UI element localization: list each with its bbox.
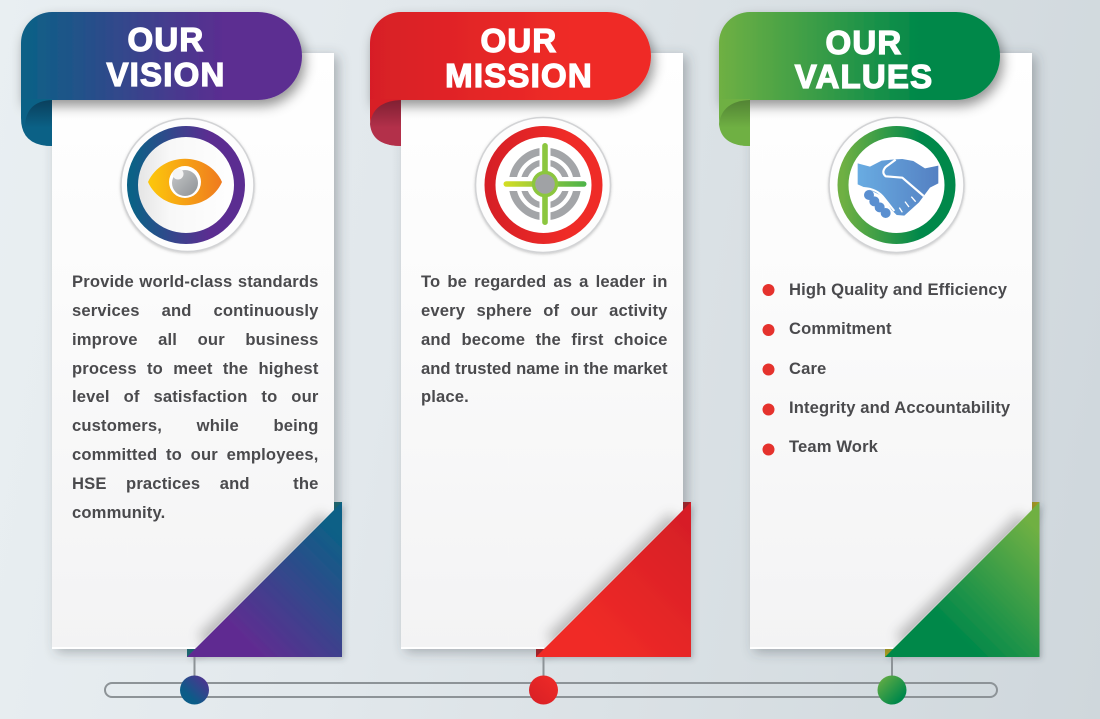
text block: vision statement: community.: [72, 503, 165, 522]
bullets: values: [762, 284, 774, 456]
text: High Quality and Efficiency: [789, 280, 1007, 299]
timeline track: [105, 683, 997, 697]
icon: eye badge: [121, 118, 254, 252]
corner triangle: vision: [187, 502, 342, 657]
connector dot: vision: [180, 657, 209, 704]
text block: vision statement: level of satisfaction to our: [72, 387, 318, 406]
corner square: values: [885, 502, 1040, 657]
heading: our values: VALUES: [795, 58, 933, 95]
panel: vision: [21, 12, 342, 704]
panel: mission: [370, 12, 691, 704]
paper: mission: [401, 53, 683, 649]
ribbon: values: [719, 12, 1000, 100]
icon: target badge: [476, 118, 610, 252]
icon: handshake badge: [829, 118, 964, 252]
corner square: vision: [187, 502, 342, 657]
text: Team Work: [789, 437, 878, 456]
text block: vision statement: [72, 272, 318, 522]
text block: mission statement: and become the first choice: [421, 330, 668, 349]
text block: vision statement: committed to our employees,: [72, 445, 318, 464]
ribbon: vision: [21, 12, 302, 100]
fold shade: values: [750, 510, 1032, 649]
fold shade: vision: [52, 510, 334, 649]
fold shade: mission: [401, 510, 683, 649]
corner triangle: mission: [536, 502, 691, 657]
text block: mission statement: every sphere of our activity: [421, 301, 668, 320]
text block: mission statement: place.: [421, 387, 469, 406]
text block: mission statement: To be regarded as a leader in: [421, 272, 668, 291]
ribbon: mission: [370, 12, 651, 100]
text block: vision statement: improve all our business: [72, 330, 318, 349]
text block: vision statement: process to meet the highest: [72, 359, 318, 378]
heading: our mission: MISSION: [445, 57, 593, 94]
text block: mission statement: [421, 272, 668, 406]
heading: our vision: [106, 21, 226, 93]
text block: vision statement: customers, while being: [72, 416, 318, 435]
heading: our mission: OUR: [481, 22, 557, 59]
heading: our mission: [445, 22, 593, 94]
text: Commitment: [789, 319, 892, 338]
corner triangle: values: [885, 502, 1040, 657]
heading: our vision: OUR: [128, 21, 204, 58]
panel: values: [719, 12, 1040, 704]
text block: vision statement: HSE practices and the: [72, 474, 318, 493]
heading: our values: OUR: [826, 24, 902, 61]
paper: values: [750, 53, 1032, 649]
ribbon curl: values: [719, 99, 750, 146]
connector dot: mission: [529, 657, 558, 704]
text: Integrity and Accountability: [789, 398, 1010, 417]
text block: mission statement: and trusted name in the market: [421, 359, 668, 378]
heading: our vision: VISION: [106, 56, 226, 93]
text block: vision statement: Provide world-class standards: [72, 272, 318, 291]
list: values: [789, 280, 1010, 456]
ribbon curl: mission: [370, 99, 401, 146]
heading: our values: [795, 24, 933, 95]
ribbon curl: vision: [21, 99, 52, 146]
connector dot: values: [878, 657, 906, 704]
text block: vision statement: services and continuously: [72, 301, 318, 320]
text: Care: [789, 359, 826, 378]
corner square: mission: [536, 502, 691, 657]
paper: vision: [52, 53, 334, 649]
